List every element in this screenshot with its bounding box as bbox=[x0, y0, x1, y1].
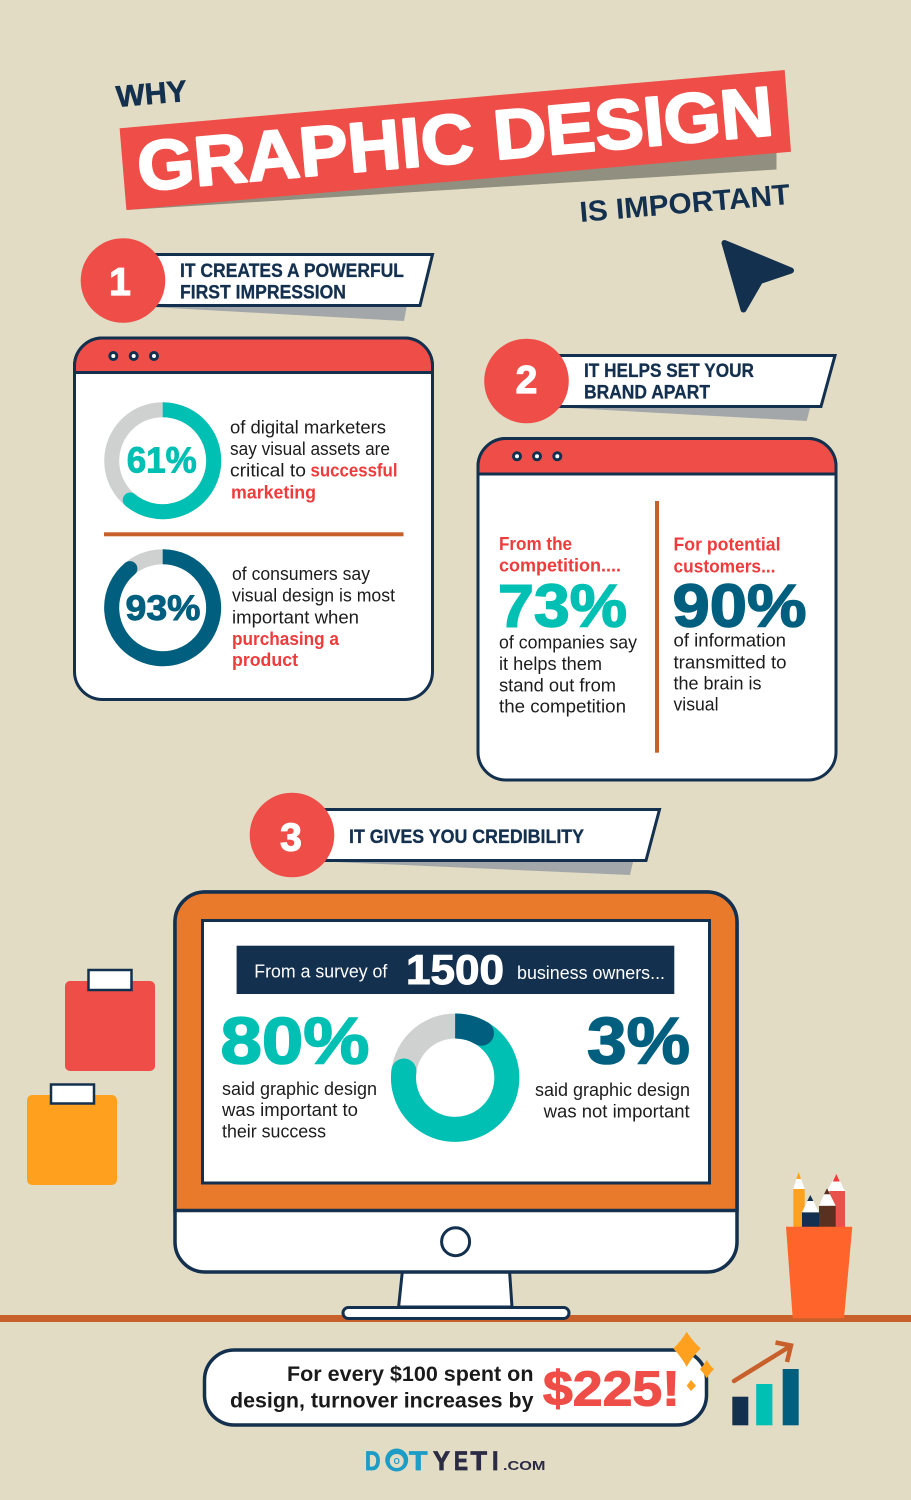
title word: why: WHY bbox=[115, 75, 188, 114]
heading 3 bbox=[250, 793, 659, 877]
stat text: digital marketers: say visual assets are bbox=[230, 439, 390, 459]
stat: 80% important: their success bbox=[222, 1121, 326, 1141]
monitor orange bezel bbox=[175, 892, 737, 1210]
column: customers: the brain is bbox=[674, 673, 762, 693]
survey bar bbox=[237, 946, 674, 994]
column: customers: customers... bbox=[674, 556, 776, 576]
survey bar: business owners... bbox=[517, 963, 665, 983]
stat text: consumers: visual design is most bbox=[232, 586, 395, 606]
stat text: digital marketers: marketing bbox=[231, 482, 316, 502]
number circle bbox=[81, 238, 165, 323]
stat text: consumers bbox=[232, 564, 395, 670]
divider bbox=[104, 532, 404, 536]
window dots bbox=[110, 352, 158, 360]
orange pencil bbox=[793, 1172, 805, 1227]
callout amount: $225! bbox=[543, 1362, 680, 1416]
column divider bbox=[655, 501, 659, 753]
column: customers bbox=[672, 535, 806, 715]
title banner shadow bbox=[127, 150, 776, 210]
title banner bbox=[120, 70, 791, 210]
monitor stand bbox=[399, 1272, 512, 1307]
stat: 73%: 73% bbox=[498, 572, 627, 640]
number: 3 bbox=[280, 816, 302, 860]
column: customers: visual bbox=[674, 695, 718, 715]
number circle bbox=[250, 793, 334, 877]
column: customers: of information bbox=[674, 631, 786, 651]
logo: dotyeti.com: T bbox=[409, 1446, 428, 1476]
title bbox=[115, 70, 792, 229]
panel: brand stats bbox=[478, 438, 836, 780]
window dots bbox=[514, 453, 561, 460]
column: competition: of companies say bbox=[499, 632, 637, 652]
stat: 3% not important bbox=[535, 1004, 690, 1121]
screen bbox=[202, 920, 710, 1183]
logo: dotyeti.com: Y bbox=[433, 1446, 450, 1476]
logo: dotyeti.com: I bbox=[492, 1446, 498, 1476]
stat: 61%: 61% bbox=[127, 440, 197, 480]
monitor body bbox=[175, 892, 737, 1272]
heading 2 bbox=[484, 339, 835, 423]
callout text: For every $100 spent on bbox=[287, 1362, 534, 1386]
stat text: consumers: important when bbox=[232, 607, 359, 627]
callout text line 2: design, turnover increases by bbox=[230, 1389, 534, 1413]
heading 1 bbox=[81, 238, 432, 323]
window frame bbox=[74, 338, 432, 700]
heading text: IT GIVES YOU CREDIBILITY bbox=[349, 827, 584, 848]
icon: pencil cup bbox=[786, 1172, 852, 1318]
stat: 80% important: 80% bbox=[220, 1004, 370, 1078]
red pencil bbox=[827, 1174, 845, 1227]
icon: growth chart bbox=[732, 1342, 799, 1425]
icon: cursor arrow bbox=[724, 243, 791, 310]
heading text line 2: FIRST IMPRESSION bbox=[180, 282, 346, 304]
stat: 80% important bbox=[220, 1004, 377, 1141]
logo: dotyeti.com: D bbox=[365, 1446, 380, 1476]
heading text: IT CREATES A POWERFUL bbox=[180, 261, 404, 282]
logo: dotyeti.com: E bbox=[454, 1446, 468, 1476]
monitor bbox=[175, 892, 737, 1318]
callout: turnover bbox=[204, 1332, 714, 1425]
stat: 80% important: said graphic design bbox=[222, 1079, 377, 1099]
ribbon bbox=[550, 356, 835, 406]
donut chart: survey bbox=[391, 1021, 507, 1129]
sparkles bbox=[673, 1332, 714, 1391]
column: competition: competition.... bbox=[499, 556, 621, 576]
logo: dotyeti.com: .COM bbox=[503, 1458, 546, 1473]
stat: 90%: 90% bbox=[672, 572, 806, 640]
number: 1 bbox=[109, 261, 131, 304]
number: 2 bbox=[516, 359, 537, 402]
column: competition: it helps them bbox=[499, 654, 602, 674]
yeti face bbox=[385, 1448, 408, 1472]
donut chart: 93% bbox=[112, 557, 214, 659]
column: competition: From the bbox=[499, 534, 572, 554]
stat text: digital marketers: successful bbox=[310, 461, 398, 481]
panel: first impression stats bbox=[74, 338, 433, 700]
title word: is important: IS IMPORTANT bbox=[578, 179, 792, 229]
survey bar: 1500 bbox=[406, 946, 504, 993]
column: customers: For potential bbox=[674, 535, 780, 555]
ribbon bbox=[315, 810, 660, 860]
ribbon bbox=[150, 254, 432, 306]
column: customers: transmitted to bbox=[674, 652, 786, 672]
stat text: consumers: of consumers say bbox=[232, 564, 370, 584]
stat: 3% not important: was not important bbox=[543, 1101, 690, 1121]
logo: dotyeti.com: T bbox=[470, 1446, 488, 1476]
monitor base bbox=[343, 1308, 569, 1318]
icon: red clipboard bbox=[65, 970, 155, 1071]
heading text line 2: BRAND APART bbox=[584, 382, 710, 404]
growth arrow bbox=[734, 1342, 791, 1381]
icon: orange clipboard bbox=[27, 1084, 117, 1185]
stat: 80% important: was important to bbox=[221, 1100, 358, 1120]
stat text: consumers: purchasing a bbox=[232, 629, 340, 649]
column: competition bbox=[498, 534, 637, 717]
cup bbox=[786, 1227, 852, 1318]
survey bar: From a survey of bbox=[254, 962, 388, 982]
stat: 3% not important: 3% bbox=[587, 1004, 690, 1078]
shelf line bbox=[0, 1315, 911, 1322]
brown pencil bbox=[819, 1188, 836, 1227]
column: competition: stand out from bbox=[499, 676, 616, 696]
window title bar bbox=[478, 438, 836, 474]
title word: graphic design: GRAPHIC DESIGN bbox=[134, 72, 776, 206]
stat text: digital marketers: critical to bbox=[230, 461, 306, 481]
yeti face: O bbox=[394, 1457, 400, 1466]
window title bar bbox=[74, 338, 433, 372]
number circle bbox=[484, 339, 569, 423]
power button bbox=[442, 1228, 470, 1256]
ribbon shadow bbox=[152, 307, 407, 321]
stat: 93%: 93% bbox=[126, 589, 200, 628]
callout pill bbox=[204, 1350, 706, 1425]
stat text: digital marketers: of digital marketers bbox=[230, 417, 386, 437]
donut chart: 61% bbox=[112, 410, 214, 512]
stat text: consumers: product bbox=[232, 650, 298, 670]
stat: 3% not important: said graphic design bbox=[535, 1080, 690, 1100]
ribbon shadow bbox=[335, 862, 633, 875]
navy pencil bbox=[802, 1195, 819, 1227]
heading text: IT HELPS SET YOUR bbox=[584, 361, 754, 382]
stat text: digital marketers bbox=[230, 417, 398, 502]
window frame bbox=[478, 438, 836, 780]
ribbon shadow bbox=[570, 408, 810, 421]
logo: dotyeti.com bbox=[365, 1446, 546, 1476]
column: competition: the competition bbox=[499, 697, 626, 717]
